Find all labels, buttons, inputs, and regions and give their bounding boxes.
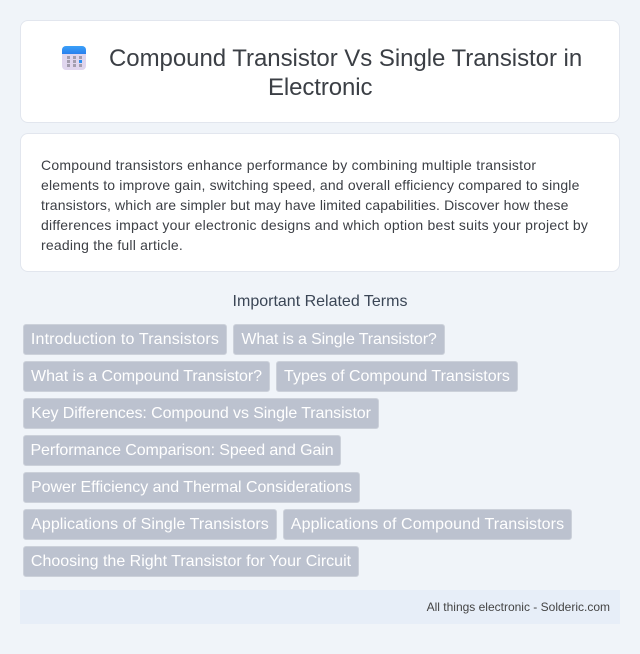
tag: key differences (23, 398, 379, 429)
tag: power efficiency (23, 472, 360, 503)
text block: summary: reading the full article. (41, 237, 183, 253)
tag: applications compound (283, 509, 572, 540)
tag: types: Types of Compound Transistors (284, 368, 510, 385)
tag: introduction: Introduction to Transistors (31, 331, 219, 348)
title (109, 45, 582, 101)
tag: choosing: Choosing the Right Transistor for Your Circuit (31, 553, 351, 570)
text block: summary: transistors, which are simpler but may have limited capabilities. Discover how these (41, 197, 569, 213)
text block: summary (41, 157, 588, 253)
tag: power efficiency: Power Efficiency and Thermal Considerations (31, 479, 352, 496)
icon: calendar (62, 46, 86, 70)
tag: introduction (23, 324, 227, 355)
tag: single transistor (233, 324, 445, 355)
footer credit: All things electronic - Solderic.com (427, 600, 610, 614)
tag: single transistor: What is a Single Transistor? (241, 331, 437, 348)
tag: choosing (23, 546, 359, 577)
title: Compound Transistor Vs Single Transistor in (109, 45, 582, 72)
tag: types (276, 361, 518, 392)
title: Electronic (268, 74, 372, 101)
panel: title card (20, 20, 620, 123)
text block: summary: elements to improve gain, switching speed, and overall efficiency compared to single (41, 177, 580, 193)
text block: summary: differences impact your electronic designs and which option best suits your project by (41, 217, 588, 233)
tag: performance (23, 435, 341, 466)
tag: applications compound: Applications of Compound Transistors (291, 516, 564, 533)
text block: summary: Compound transistors enhance performance by combining multiple transistor (41, 157, 536, 173)
tag: compound transistor (23, 361, 270, 392)
heading: related terms: Important Related Terms (233, 293, 407, 310)
panel: intro text (20, 133, 620, 272)
panel: term tags (23, 324, 572, 577)
tag: applications single (23, 509, 277, 540)
footer (20, 590, 620, 624)
tag: key differences: Key Differences: Compound vs Single Transistor (31, 405, 371, 422)
tag: performance: Performance Comparison: Speed and Gain (30, 442, 334, 459)
tag: applications single: Applications of Single Transistors (31, 516, 269, 533)
tag: compound transistor: What is a Compound Transistor? (31, 368, 262, 385)
